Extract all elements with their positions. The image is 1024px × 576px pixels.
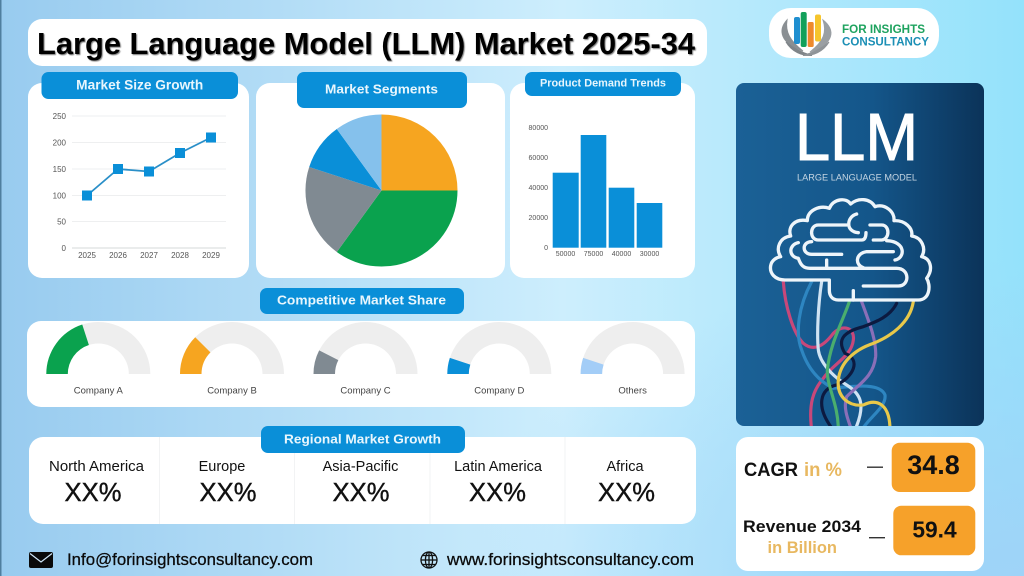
line chart: 2026 [109, 251, 127, 260]
KPI: revenue: Revenue 2034 [743, 517, 862, 536]
bar chart: 80000 [529, 125, 548, 132]
KPI: revenue: in Billion [768, 538, 837, 557]
footer: email: Info@forinsightsconsultancy.com [67, 551, 313, 569]
line chart: 100 [53, 192, 67, 200]
poster: LLM illustration [736, 83, 984, 430]
region: north america: North America [49, 459, 145, 475]
gauge: company b [180, 322, 284, 396]
footer: website: www.forinsightsconsultancy.com [446, 551, 694, 569]
region: asia-pacific [323, 459, 398, 507]
bar chart: 20000 [529, 215, 548, 222]
line chart: 150 [53, 165, 67, 174]
panel: market segments [256, 72, 505, 278]
pie chart [305, 114, 458, 267]
heading: market segments: Market Segments [325, 82, 438, 96]
KPI: CAGR: CAGR [744, 459, 798, 481]
gauge: others [581, 322, 685, 396]
gauge: company a [46, 322, 150, 396]
poster: LLM illustration: LLM [795, 100, 918, 175]
icon: envelope [29, 552, 53, 568]
region: asia-pacific: Asia-Pacific [323, 459, 398, 475]
line chart: 250 [53, 112, 67, 121]
KPI: CAGR: 34.8 [907, 450, 960, 480]
panel: competitive market share [27, 321, 695, 407]
KPI: CAGR [744, 443, 975, 492]
panel: regional market growth [29, 426, 696, 524]
gauge: company a: Company A [74, 386, 124, 396]
strands [783, 282, 913, 430]
KPI: revenue [743, 506, 975, 557]
line chart: 2028 [171, 251, 189, 260]
region: europe: Europe [199, 459, 245, 475]
heading: regional market growth [261, 426, 465, 453]
heading: competitive market share: Competitive Market Share [277, 292, 446, 308]
bar chart: 60000 [529, 155, 548, 162]
gauge: company d: Company D [474, 386, 525, 396]
panel: KPIs [736, 437, 984, 571]
KPI: revenue: 59.4 [912, 516, 957, 542]
bar chart: 30000 [640, 251, 659, 258]
heading: regional market growth: Regional Market Growth [284, 432, 441, 446]
logo: CONSULTANCY [842, 36, 929, 48]
region: north america [49, 459, 145, 507]
logo: FOR INSIGHTS [842, 24, 925, 36]
panel: market size growth [28, 72, 249, 278]
bar chart: 50000 [556, 251, 575, 258]
icon: bars and orbit [782, 12, 831, 56]
heading: competitive market share [260, 288, 464, 314]
region: latin america [454, 459, 543, 507]
heading: product demand trends: Product Demand Trends [540, 78, 666, 90]
title: Large Language Model (LLM) Market 2025-34 [37, 26, 696, 61]
region: europe: XX% [200, 479, 256, 507]
gauge: company b: Company B [207, 386, 257, 396]
heading: market size growth [42, 72, 238, 99]
region: asia-pacific: XX% [333, 479, 389, 507]
region: africa: XX% [598, 479, 655, 507]
KPI: CAGR: in % [804, 459, 842, 481]
bar chart: 75000 [584, 251, 603, 258]
logo [769, 8, 939, 58]
region: latin america: Latin America [454, 459, 543, 475]
gauge: company c: Company C [340, 386, 391, 396]
line chart: 2027 [140, 251, 158, 260]
gauge: others: Others [618, 386, 647, 396]
region: north america: XX% [65, 479, 121, 507]
bar chart [529, 125, 662, 258]
heading: product demand trends [525, 72, 681, 96]
line chart: 0 [62, 244, 67, 253]
icon: globe [421, 552, 437, 568]
region: africa [598, 459, 655, 507]
icon: brain [770, 200, 930, 300]
bar chart: 0 [544, 245, 548, 252]
panel: product demand trends [510, 72, 695, 278]
line chart: 50 [57, 218, 67, 226]
gauge: company d [447, 322, 551, 396]
line chart: 200 [53, 138, 67, 148]
region: africa: Africa [606, 459, 644, 475]
heading: market size growth: Market Size Growth [76, 77, 203, 92]
bar chart: 40000 [612, 251, 631, 258]
bar chart: 40000 [529, 185, 548, 192]
region: europe [199, 459, 256, 507]
gauge: company c [314, 322, 418, 396]
region: latin america: XX% [469, 479, 526, 507]
line chart: 2029 [202, 251, 220, 260]
line chart [53, 112, 226, 260]
heading: market segments [297, 72, 467, 108]
poster: LLM illustration: LARGE LANGUAGE MODEL [797, 172, 917, 184]
line chart: 2025 [78, 251, 96, 260]
